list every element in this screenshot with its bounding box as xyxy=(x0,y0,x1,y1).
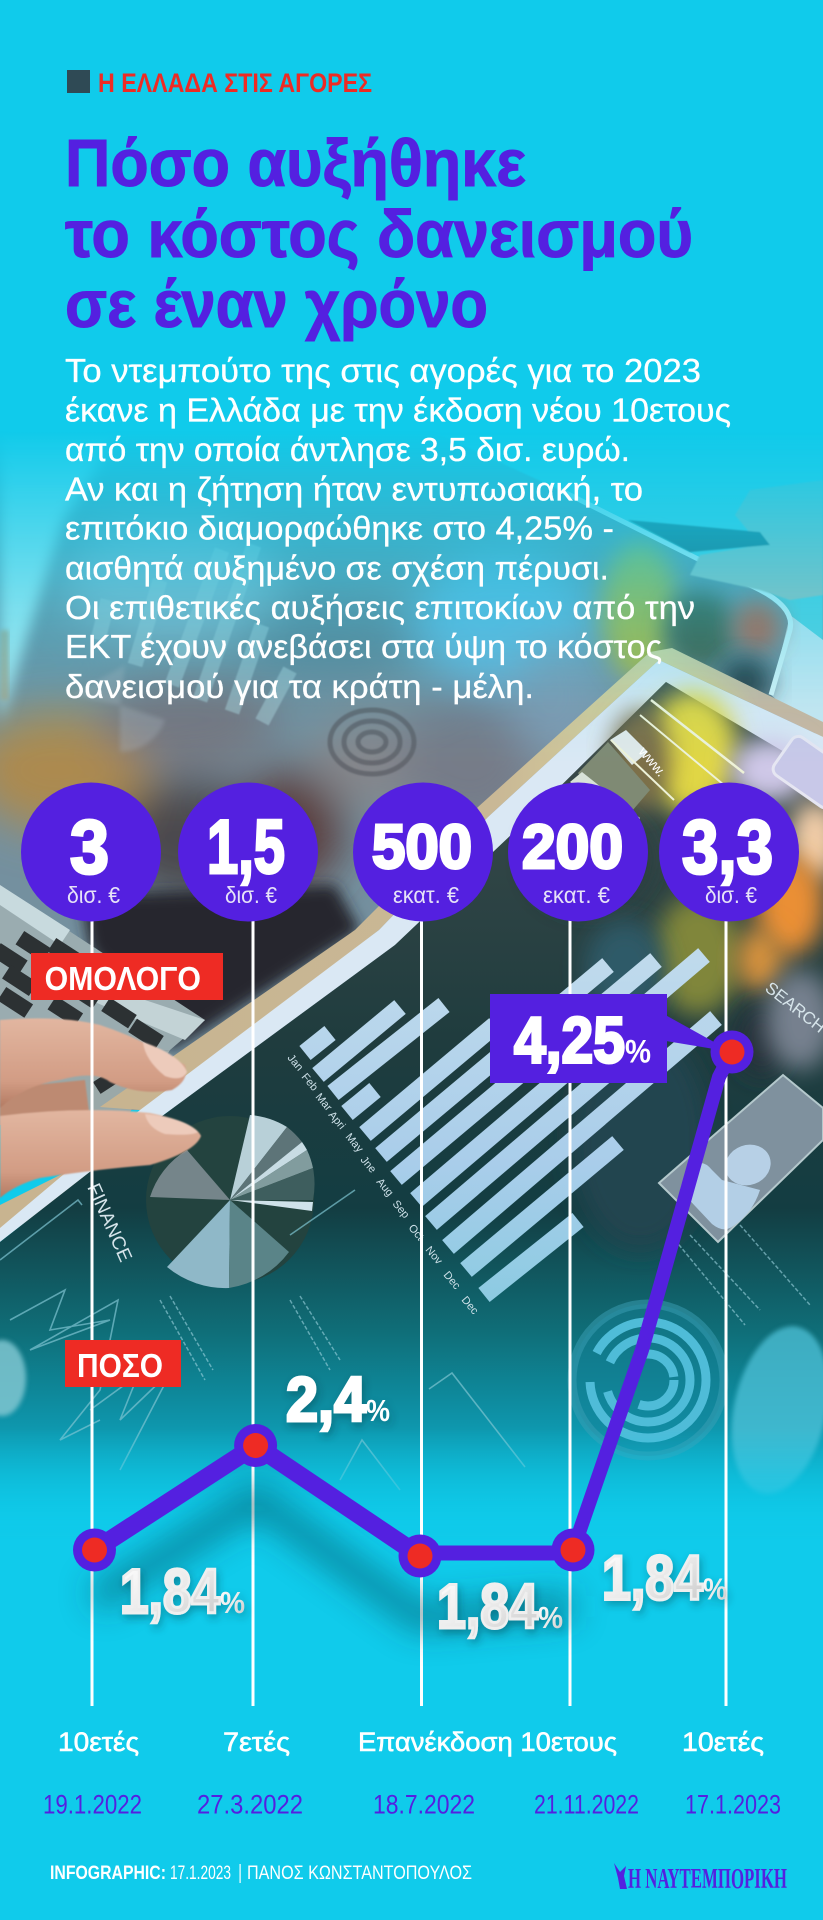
paper clip xyxy=(770,733,823,811)
fingers xyxy=(0,1018,201,1198)
chart month labels: Sep xyxy=(390,1198,411,1221)
tablet frame xyxy=(0,648,823,1242)
laptop lid, upper right xyxy=(508,464,823,737)
bubble: 200 εκατ.: εκατ. € xyxy=(543,882,610,908)
line chart: yield path xyxy=(94,1052,732,1556)
bubble: 500 εκατ.: 500 xyxy=(372,813,472,882)
label: ΠΟΣΟ xyxy=(65,1340,181,1387)
footer credit xyxy=(50,1863,472,1884)
bubble: 500 εκατ.: εκατ. € xyxy=(393,882,459,908)
body text xyxy=(65,352,731,705)
bubble: 1,5 δισ. xyxy=(178,782,318,922)
chart marker: 19.1.2022 xyxy=(73,1528,116,1572)
value: 1,84% third: 1,84 xyxy=(602,1544,703,1614)
issue dates: 18.7.2022 xyxy=(373,1790,475,1820)
body text: έκανε η Ελλάδα με την έκδοση νέου 10ετους xyxy=(65,392,731,428)
bubble: 1,5 δισ.: δισ. € xyxy=(225,882,277,908)
chart marker: 17.1.2023 xyxy=(710,1030,754,1074)
line chart shadow xyxy=(95,1500,573,1618)
issue dates: 27.3.2022 xyxy=(197,1790,303,1820)
value: 1,84% second: % xyxy=(538,1600,563,1635)
chart month labels: Dec xyxy=(441,1269,463,1292)
tablet screen xyxy=(0,682,823,1560)
chart month labels: Nov xyxy=(423,1244,445,1267)
photo: blurred upper desk xyxy=(0,430,823,1110)
chart month labels: Feb xyxy=(299,1071,320,1093)
tablet top stripes xyxy=(570,700,744,830)
bond maturity labels: Επανέκδοση 10ετους xyxy=(358,1727,617,1757)
chart month labels: Mar xyxy=(313,1091,334,1114)
chart month labels: Apri xyxy=(326,1109,347,1132)
callout: 4,25%: % xyxy=(625,1034,651,1070)
mirrored pie xyxy=(72,665,165,752)
body text: Οι επιθετικές αυξήσεις επιτοκίων από την xyxy=(65,589,695,626)
bond maturity labels: 10ετές xyxy=(682,1727,764,1757)
chart month labels: Jan xyxy=(285,1052,305,1074)
tablet top stripes: www. xyxy=(635,743,669,780)
line art on tablet xyxy=(0,1190,525,1490)
bond maturity labels: 10ετές xyxy=(58,1727,139,1757)
bubble: 3,3 δισ.: δισ. € xyxy=(705,882,757,908)
pale left wedge of desk xyxy=(0,455,94,720)
body text: ΕΚΤ έχουν ανεβάσει στα ύψη το κόστος xyxy=(65,628,662,665)
issue dates xyxy=(43,1790,781,1820)
chart month labels: Oct xyxy=(406,1222,426,1243)
body text: δανεισμού για τα κράτη - μέλη. xyxy=(65,668,534,705)
chart month labels xyxy=(285,1052,481,1317)
label: ΟΜΟΛΟΓΟ: ΟΜΟΛΟΓΟ xyxy=(45,960,201,997)
footer credit: 17.1.2023 xyxy=(170,1863,231,1884)
footer credit: INFOGRAPHIC: xyxy=(50,1863,166,1884)
bubble: 3 δισ.: 3 xyxy=(70,805,109,890)
body text: επιτόκιο διαμορφώθηκε στο 4,25% - xyxy=(65,510,614,546)
title: σε έναν χρόνο xyxy=(65,267,488,342)
value: 2,4%: 2,4 xyxy=(286,1365,366,1435)
tablet screen text xyxy=(82,978,823,1265)
chart month labels: Jne xyxy=(358,1154,378,1176)
bar chart on tablet xyxy=(305,955,716,1295)
footer credit: ΠΑΝΟΣ ΚΩΝΣΤΑΝΤΟΠΟΥΛΟΣ xyxy=(247,1863,472,1884)
tablet screen text: FINANCE xyxy=(82,1180,136,1265)
value: 2,4%: % xyxy=(366,1393,390,1428)
body text: Το ντεμπούτο της στις αγορές για το 2023 xyxy=(65,352,701,389)
title: Πόσο αυξήθηκε xyxy=(65,126,526,201)
bubble: 200 εκατ. xyxy=(508,782,648,922)
chart marker: 18.7.2022 xyxy=(398,1534,442,1578)
bond amount bubbles xyxy=(21,782,799,922)
label: ΠΟΣΟ: ΠΟΣΟ xyxy=(77,1347,163,1384)
bubble: 3 δισ. xyxy=(21,782,161,922)
title xyxy=(65,126,693,342)
bubble: 500 εκατ. xyxy=(353,782,493,922)
callout: 4,25% xyxy=(490,994,732,1083)
issue dates: 21.11.2022 xyxy=(534,1790,639,1820)
target circle icon xyxy=(572,1304,724,1456)
callout: 4,25%: 4,25 xyxy=(514,1004,625,1076)
issue dates: 19.1.2022 xyxy=(43,1790,142,1820)
chart marker: 27.3.2022 xyxy=(234,1424,277,1467)
vertical timeline lines xyxy=(92,915,726,1706)
title: το κόστος δανεισμού xyxy=(65,197,693,272)
thumbs at the bottom of the photo xyxy=(0,1317,823,1503)
bond maturity labels: 7ετές xyxy=(223,1727,290,1757)
icon: blurred spiral on the desk xyxy=(330,710,414,774)
small tablet text blocks xyxy=(160,1225,810,1380)
issue dates: 17.1.2023 xyxy=(685,1790,781,1820)
kicker: Η ΕΛΛΑΔΑ ΣΤΙΣ ΑΓΟΡΕΣ xyxy=(98,68,372,98)
value: 1,84% first: 1,84 xyxy=(120,1557,220,1627)
value: 1,84% second: 1,84 xyxy=(437,1572,538,1642)
chart month labels: Dec xyxy=(459,1294,481,1317)
body text: από την οποία άντλησε 3,5 δισ. ευρώ. xyxy=(65,431,630,468)
hand with phone xyxy=(628,480,823,600)
mirrored chart bars xyxy=(98,545,290,722)
body text: αισθητά αυξημένο σε σχέση πέρυσι. xyxy=(65,550,609,586)
value: 1,84% first: % xyxy=(220,1585,245,1620)
chart marker: 21.11.2022 xyxy=(552,1528,594,1572)
chart month labels: Aug xyxy=(374,1176,395,1199)
bubble: 1,5 δισ.: 1,5 xyxy=(207,805,285,890)
bubble: 3,3 δισ. xyxy=(659,782,799,922)
label: ΟΜΟΛΟΓΟ xyxy=(31,953,223,1000)
value: 1,84% third: % xyxy=(703,1572,727,1606)
tablet colour glows xyxy=(572,674,823,1252)
bubble: 3 δισ.: δισ. € xyxy=(67,882,120,908)
person icon on tablet xyxy=(659,1075,823,1242)
pie chart on tablet xyxy=(146,1115,315,1288)
bubble: 3,3 δισ.: 3,3 xyxy=(682,805,773,890)
bond maturity labels xyxy=(58,1727,764,1757)
body text: Αν και η ζήτηση ήταν εντυπωσιακή, το xyxy=(65,470,643,508)
chart month labels: May xyxy=(343,1131,366,1155)
laptop keyboard xyxy=(0,885,360,1125)
bubble: 200 εκατ.: 200 xyxy=(522,813,623,882)
photo: tablet with charts and laptop xyxy=(0,430,823,1560)
